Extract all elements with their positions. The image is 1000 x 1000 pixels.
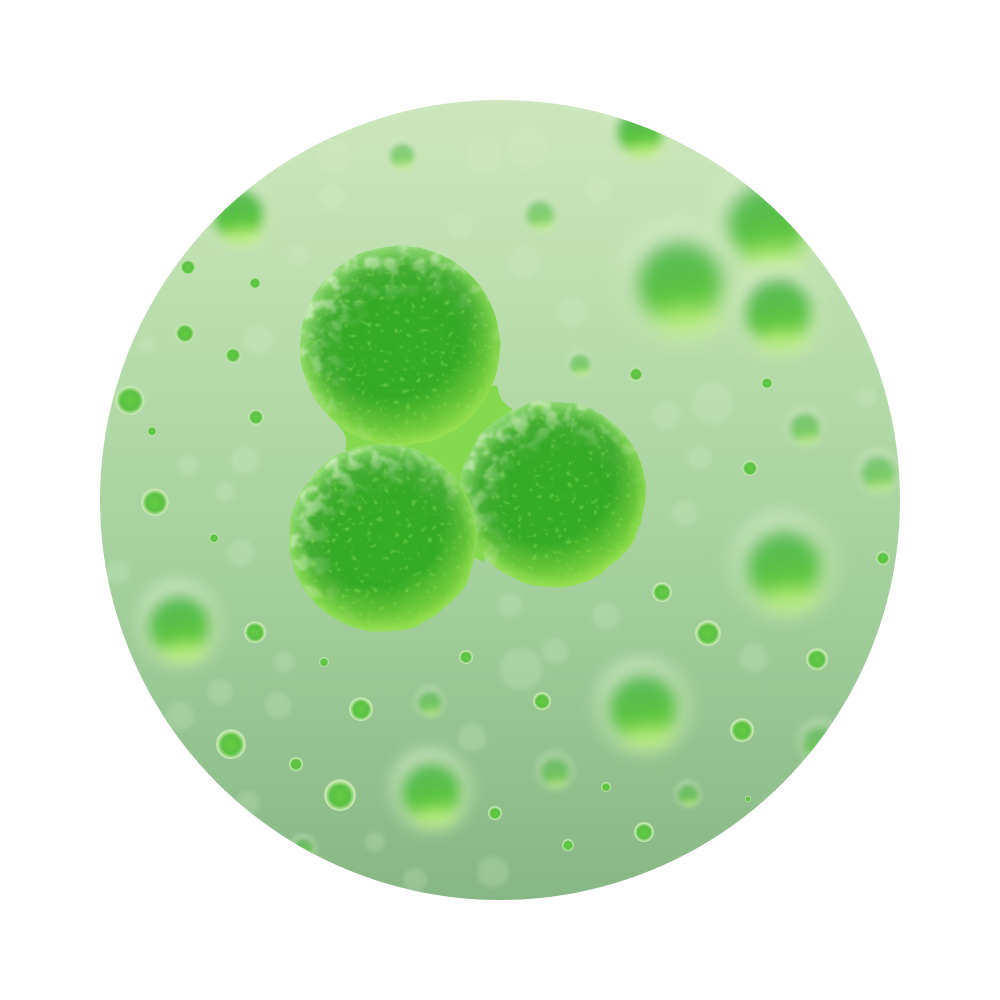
cell cluster [289, 246, 646, 632]
cell: right [460, 401, 646, 587]
bubbles clipped to disc [106, 98, 902, 892]
cell: top [300, 246, 500, 446]
faint background bubbles [108, 401, 866, 892]
small in-focus bubbles [115, 259, 890, 851]
large out-of-focus bubbles [135, 98, 837, 832]
illustration: green cell cluster inside a circle [100, 100, 900, 900]
background disc [100, 100, 900, 900]
medium soft bubbles [289, 138, 902, 862]
cell: bottom left [289, 444, 477, 632]
membrane junction between cells [338, 385, 512, 562]
